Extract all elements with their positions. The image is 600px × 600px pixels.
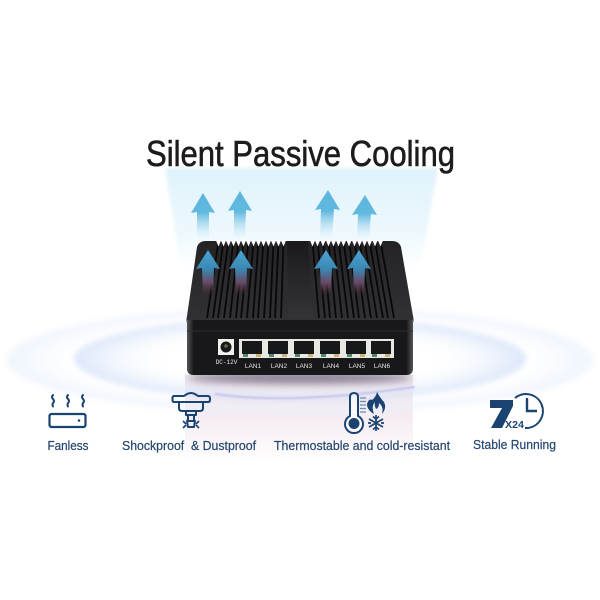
icon: fanless box with heat waves xyxy=(50,395,86,427)
centre heatsink strip xyxy=(287,241,313,318)
feature: stable running xyxy=(473,394,556,452)
feature: thermostable and cold-resistant xyxy=(274,392,450,453)
background: inner heat ripple xyxy=(74,317,526,401)
arrow: rising air 3 xyxy=(315,190,340,240)
port labels: LAN3 xyxy=(296,363,313,370)
arrow: heat rising 1 xyxy=(196,250,220,295)
title: Silent Passive Cooling xyxy=(146,133,455,174)
mini PC device xyxy=(186,240,414,375)
front panel xyxy=(187,320,413,375)
background: lavender ripple arc xyxy=(215,387,415,398)
feature: fanless xyxy=(48,395,89,453)
label: Thermostable and cold-resistant xyxy=(274,438,450,453)
port labels: LAN5 xyxy=(349,363,366,370)
icon: 7x24 clock: X24 xyxy=(505,420,524,431)
arrows over the heatsink xyxy=(196,250,371,295)
icon: thermometer xyxy=(345,393,366,433)
port 1 xyxy=(242,341,262,357)
port 2 xyxy=(268,341,288,357)
arrow: heat rising 3 xyxy=(314,250,338,295)
label: Stable Running xyxy=(473,437,556,452)
label: Fanless xyxy=(48,438,89,453)
arrow: rising air 1 xyxy=(191,193,215,240)
port 6 xyxy=(371,341,391,357)
port labels: LAN4 xyxy=(323,363,340,370)
arrow: heat rising 4 xyxy=(347,250,371,295)
background: outer heat ripple xyxy=(6,306,594,414)
DC label: DC-12V xyxy=(216,359,238,366)
label: Shockproof & Dustproof xyxy=(122,438,256,453)
port labels: LAN2 xyxy=(271,363,288,370)
arrow: rising air 4 xyxy=(352,195,377,240)
shadow under device xyxy=(188,372,412,384)
heatsink fins xyxy=(207,241,394,318)
arrows above the device xyxy=(191,190,377,240)
icon: snowflake xyxy=(368,415,384,431)
fin tooth gaps xyxy=(216,240,383,246)
DC power jack xyxy=(218,339,234,355)
arrow: rising air 2 xyxy=(228,191,252,240)
background: warm glow under device xyxy=(185,375,413,462)
port 5 xyxy=(346,341,366,357)
port labels: LAN1 xyxy=(245,363,262,370)
front panel seam xyxy=(187,330,413,332)
feature: shockproof and dustproof xyxy=(122,393,256,453)
device body xyxy=(186,241,414,375)
LAN port block xyxy=(239,339,394,358)
port labels: LAN6 xyxy=(374,363,391,370)
background: cooling air beam xyxy=(165,168,438,270)
port 4 xyxy=(320,341,340,357)
arrow: heat rising 2 xyxy=(229,250,253,295)
port 3 xyxy=(294,341,314,357)
port labels xyxy=(245,363,391,370)
icon: mounted shock absorber xyxy=(172,393,210,428)
icon: flame xyxy=(367,392,385,414)
screw holes xyxy=(290,321,313,323)
